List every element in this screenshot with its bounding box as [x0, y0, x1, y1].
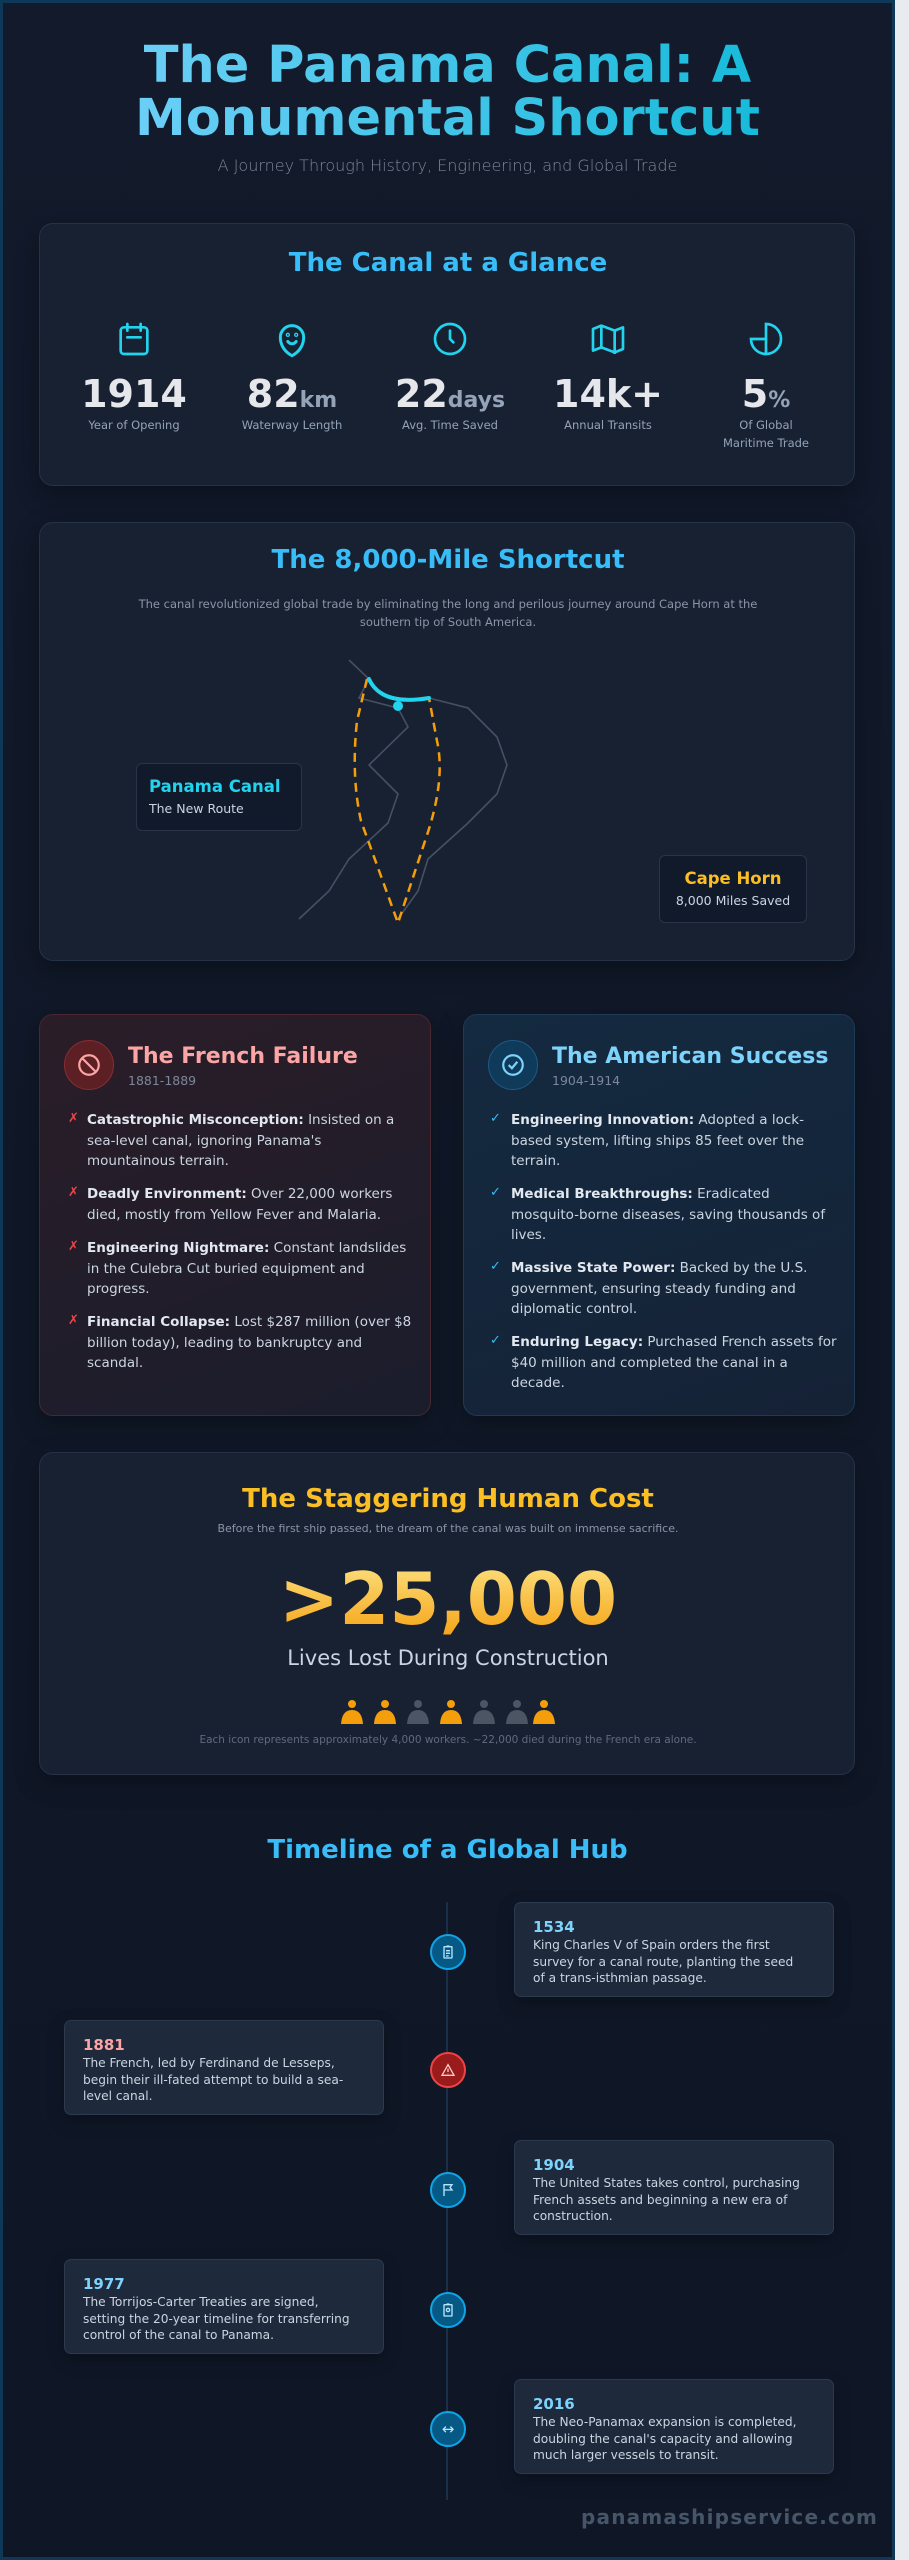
- card: 1881: The French, led by Ferdinand de Lesseps, begin their ill-fated attempt to build a sea-level canal.: [83, 2056, 343, 2103]
- icon: clock: [434, 322, 466, 356]
- heading: human cost: The Staggering Human Cost: [242, 1484, 654, 1514]
- stat: 5%: 5%: [742, 372, 790, 416]
- card: 1904: 1904: [533, 2156, 575, 2174]
- date: american: 1904-1914: [552, 1073, 620, 1088]
- timeline: 1534: [430, 1902, 834, 2002]
- stat: 22 days: Avg. Time Saved: [402, 418, 498, 432]
- list: french problems: Deadly Environment: Over 22,000 workers died, mostly from Yellow Fever and Malaria.: [87, 1186, 392, 1223]
- footnote: Each icon represents approximately 4,000 workers. ~22,000 died during the French era alone.: [199, 1734, 697, 1746]
- caption: lives lost: Lives Lost During Construction: [287, 1646, 609, 1670]
- title: The Panama Canal: A: [144, 36, 751, 95]
- date: french: 1881-1889: [128, 1073, 196, 1088]
- heading: shortcut: The 8,000-Mile Shortcut: [271, 545, 625, 575]
- list: american achievements: Medical Breakthroughs: Eradicated mosquito-borne diseases, saving thousands of lives.: [511, 1186, 825, 1243]
- timeline: 2016: [430, 2379, 834, 2478]
- icon: pie: [750, 322, 782, 356]
- panel: american success: [463, 1014, 855, 1416]
- card: 1881: 1881: [83, 2036, 125, 2054]
- stat: 22 days: [395, 322, 505, 432]
- icon: arrows: [430, 2411, 466, 2447]
- timeline: 1977: [64, 2259, 466, 2358]
- icon: calendar: [119, 322, 149, 356]
- stat: 14k+: [553, 324, 663, 432]
- stat: 1914: [81, 322, 187, 432]
- title: [3, 39, 892, 145]
- stat: 1914: Year of Opening: [88, 418, 180, 432]
- big number: [40, 1554, 856, 1644]
- card: 1904: [514, 2140, 834, 2235]
- icon: map: [592, 324, 624, 354]
- icon: arrows: ↔: [442, 2420, 454, 2438]
- card: 2016: The Neo-Panamax expansion is completed, doubling the canal's capacity and allowing much larger vessels to transit.: [533, 2415, 796, 2462]
- list: french problems: Financial Collapse: Lost $287 million (over $8 billion today), leading to bankruptcy and scandal.: [87, 1314, 411, 1371]
- stat: 5%: Of Global: [739, 418, 793, 432]
- title: Monumental Shortcut: [135, 89, 760, 148]
- footer: source: panamashipservice.com: [581, 2505, 878, 2529]
- panel: french failure: [39, 1014, 431, 1416]
- list: french problems: ✗: [68, 1111, 79, 1126]
- list: french problems: Catastrophic Misconception: Insisted on a sea-level canal, ignoring Panama's mountainous terrain.: [87, 1112, 394, 1169]
- list: french problems: ✗: [68, 1185, 79, 1200]
- list: american achievements: ✓: [490, 1259, 501, 1274]
- list: french problems: [68, 1111, 411, 1371]
- card: 2016: [514, 2379, 834, 2474]
- stat: 1914: 1914: [81, 372, 187, 416]
- heading: french: The French Failure: [128, 1044, 358, 1069]
- label: cape horn: [659, 855, 807, 923]
- list: american achievements: Enduring Legacy: Purchased French assets for $40 million and completed the canal in a decade.: [511, 1334, 837, 1391]
- description: The canal revolutionized global trade by eliminating the long and perilous journey around Cape Horn at the southern tip of South America.: [139, 597, 757, 629]
- subtitle: A Journey Through History, Engineering, and Global Trade: [218, 156, 677, 175]
- subtitle: human cost: Before the first ship passed, the dream of the canal was built on immense sacrifice.: [217, 1522, 678, 1535]
- stat: 14k+: 14k+: [553, 372, 663, 416]
- stat: 14k+: Annual Transits: [564, 418, 652, 432]
- big number: >25,000: [279, 1557, 617, 1641]
- icon: warning: [430, 2052, 466, 2088]
- card: 1534: 1534: [533, 1918, 575, 1936]
- icon: document: [430, 2292, 466, 2328]
- label: cape horn: Cape Horn: [684, 869, 782, 888]
- panel: 8000-mile shortcut: [39, 522, 855, 961]
- icon: face pin: [278, 324, 306, 358]
- icon: prohibited: [64, 1040, 114, 1090]
- heading: glance: The Canal at a Glance: [289, 248, 607, 278]
- card: 2016: 2016: [533, 2395, 575, 2413]
- list: american achievements: [490, 1111, 837, 1391]
- card: 1881: [64, 2020, 384, 2115]
- stat: 82km: 82km: [247, 372, 337, 416]
- map: route diagram: [298, 660, 508, 921]
- list: american achievements: ✓: [490, 1185, 501, 1200]
- panel: canal at a glance: [39, 223, 855, 486]
- timeline: 1904: [430, 2140, 834, 2240]
- card: 1977: 1977: [83, 2275, 125, 2293]
- list: french problems: ✗: [68, 1313, 79, 1328]
- icon: flag: [430, 2172, 466, 2208]
- card: 1977: The Torrijos-Carter Treaties are signed, setting the 20-year timeline for transferring control of the canal to Panama.: [83, 2295, 350, 2342]
- stat: 5%: Maritime Trade: [723, 436, 809, 450]
- pictogram: workers: [341, 1700, 555, 1724]
- timeline: 1881: [64, 2020, 466, 2120]
- label: panama canal: [136, 763, 302, 831]
- label: panama canal: The New Route: [149, 801, 244, 816]
- label: cape horn: 8,000 Miles Saved: [676, 893, 790, 908]
- card: 1977: [64, 2259, 384, 2354]
- list: american achievements: Massive State Power: Backed by the U.S. government, ensuring steady funding and diplomatic control.: [511, 1260, 807, 1317]
- heading: timeline: Timeline of a Global Hub: [267, 1835, 628, 1865]
- card: 1534: [514, 1902, 834, 1997]
- card: 1534: King Charles V of Spain orders the first survey for a canal route, planting the seed of a trans-isthmian passage.: [533, 1938, 793, 1985]
- stat: 5%: [723, 322, 809, 450]
- list: american achievements: ✓: [490, 1111, 501, 1126]
- stat: 82km: [242, 324, 342, 432]
- icon: clipboard: [430, 1934, 466, 1970]
- list: french problems: Engineering Nightmare: Constant landslides in the Culebra Cut buried equipment and progress.: [87, 1240, 406, 1297]
- panel: human cost: [39, 1452, 855, 1775]
- stat: 22 days: 22days: [395, 372, 505, 416]
- list: american achievements: ✓: [490, 1333, 501, 1348]
- list: american achievements: Engineering Innovation: Adopted a lock-based system, lifting ships 85 feet over the terrain.: [511, 1112, 804, 1169]
- card: 1904: The United States takes control, purchasing French assets and beginning a new era of construction.: [533, 2176, 800, 2223]
- label: panama canal: Panama Canal: [149, 777, 281, 796]
- stat: 82km: Waterway Length: [242, 418, 342, 432]
- list: french problems: ✗: [68, 1239, 79, 1254]
- timeline axis: [446, 1902, 448, 2500]
- icon: check: [488, 1040, 538, 1090]
- heading: american: The American Success: [552, 1044, 828, 1069]
